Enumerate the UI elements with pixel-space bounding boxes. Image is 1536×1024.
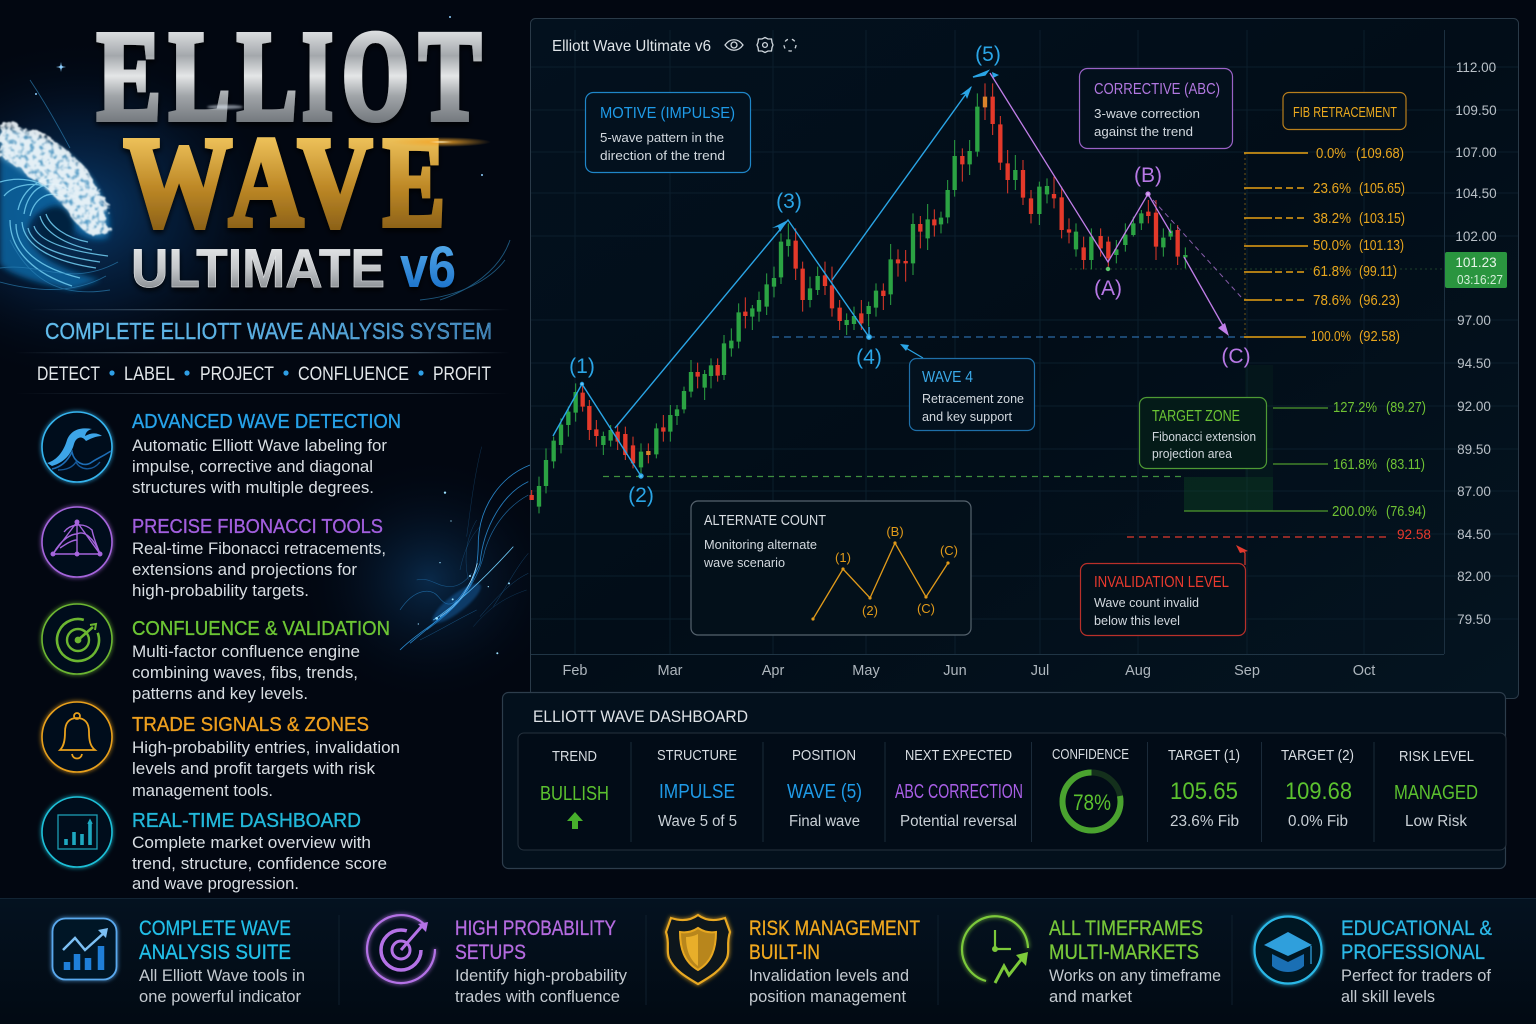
callout: wave 4 xyxy=(900,344,1034,430)
icon: target xyxy=(42,604,112,674)
callout: invalidation level: INVALIDATION LEVEL xyxy=(1094,574,1229,591)
callout: invalidation level: Wave count invalid xyxy=(1094,596,1199,610)
heading: HIGH PROBABILITY xyxy=(455,917,616,940)
tagline: LABEL xyxy=(124,364,175,385)
metric: position: POSITION xyxy=(792,747,856,764)
metric: target 2: TARGET (2) xyxy=(1281,747,1354,764)
tagline xyxy=(37,364,491,385)
fibonacci retracement levels: 50.0% xyxy=(1313,238,1351,254)
icon: fibonacci xyxy=(42,507,112,577)
feature: precise fibonacci tools xyxy=(42,507,386,600)
callout: motive impulse: 5-wave pattern in the xyxy=(600,131,724,145)
fibonacci extension levels: (89.27) xyxy=(1386,400,1426,416)
callout: wave 4: Retracement zone xyxy=(922,392,1024,406)
callout: alternate count: wave scenario xyxy=(703,556,785,570)
fibonacci retracement levels xyxy=(1244,146,1405,345)
fibonacci retracement levels: 0.0% xyxy=(1316,146,1346,162)
fibonacci extension levels: (83.11) xyxy=(1386,457,1425,473)
title: WAVE: A xyxy=(229,111,303,253)
callout: wave 4: WAVE 4 xyxy=(922,369,973,386)
metric: target 1: TARGET (1) xyxy=(1168,747,1240,764)
title: WAVE: E xyxy=(383,111,445,253)
current price tag: 101.23 xyxy=(1455,255,1497,270)
description: management tools. xyxy=(132,782,273,800)
heading: BUILT-IN xyxy=(749,941,820,964)
icon: bell xyxy=(42,702,112,772)
callout: target zone: TARGET ZONE xyxy=(1152,408,1240,425)
description xyxy=(455,967,628,1006)
feature: complete wave analysis suite xyxy=(52,917,305,1006)
fibonacci retracement levels: 100.0% xyxy=(1311,329,1351,345)
decorative stars xyxy=(35,16,483,176)
heading: CONFLUENCE & VALIDATION xyxy=(132,618,390,640)
feature: advanced wave detection xyxy=(42,411,401,497)
icon: clock with arrow xyxy=(962,916,1028,983)
metric: structure: STRUCTURE xyxy=(657,747,737,764)
price axis: 92.00 xyxy=(1457,399,1491,414)
callout: corrective abc xyxy=(1080,68,1232,148)
wave labels: (5) xyxy=(975,43,1001,66)
icon: dashboard chart xyxy=(42,797,112,867)
alternate count mini chart: (C) xyxy=(940,543,958,558)
feature: all timeframes multi-markets xyxy=(962,916,1221,1006)
description: Complete market overview with xyxy=(132,834,371,852)
fibonacci extension levels: 127.2% xyxy=(1333,400,1377,416)
price axis: 87.00 xyxy=(1457,484,1491,499)
metric: next expected: ABC CORRECTION xyxy=(895,781,1023,803)
description: Real-time Fibonacci retracements, xyxy=(132,540,386,558)
time axis: Mar xyxy=(658,663,683,679)
wave labels: (1) xyxy=(569,355,595,378)
description: and wave progression. xyxy=(132,875,299,893)
description: Automatic Elliott Wave labeling for xyxy=(132,437,388,455)
time axis: Jun xyxy=(943,663,967,679)
feature: educational and professional xyxy=(1254,916,1492,1006)
illustration: ocean wave xyxy=(0,80,510,300)
metric: next expected xyxy=(895,747,1023,830)
fibonacci extension levels: 161.8% xyxy=(1333,457,1377,473)
panel: dashboard xyxy=(502,692,1506,868)
wave lines: motive xyxy=(553,71,999,478)
fibonacci retracement levels: 61.8% xyxy=(1313,264,1351,280)
description xyxy=(132,437,388,497)
fibonacci retracement levels: (105.65) xyxy=(1359,181,1405,197)
description: patterns and key levels. xyxy=(132,685,308,703)
metric: target 1: 105.65 xyxy=(1170,778,1238,805)
description: Perfect for traders of xyxy=(1341,967,1491,985)
metric: trend xyxy=(540,748,609,829)
description: Works on any timeframe xyxy=(1049,967,1221,985)
description xyxy=(132,739,400,800)
description: High-probability entries, invalidation xyxy=(132,739,400,757)
time axis: Sep xyxy=(1234,663,1260,679)
title: ELLIOT: L xyxy=(237,5,297,147)
callout: corrective abc: against the trend xyxy=(1094,125,1193,139)
callout: motive impulse xyxy=(586,92,750,172)
wave labels: (B) xyxy=(1134,164,1162,187)
callout: target zone xyxy=(1140,398,1266,468)
heading: MULTI-MARKETS xyxy=(1049,941,1199,964)
metric: target 1 xyxy=(1168,747,1240,830)
metric: risk level: RISK LEVEL xyxy=(1399,748,1474,765)
title: ELLIOT: T xyxy=(419,5,481,147)
metric: target 2: 0.0% Fib xyxy=(1288,813,1348,830)
metric: structure xyxy=(657,747,737,830)
metric: risk level: MANAGED xyxy=(1394,782,1478,804)
icon: wave xyxy=(42,412,112,482)
metric: position: Final wave xyxy=(789,813,860,830)
metric: target 1: 23.6% Fib xyxy=(1170,813,1239,830)
description xyxy=(139,967,305,1006)
callout: alternate count xyxy=(691,501,971,635)
price axis: 109.50 xyxy=(1455,103,1497,118)
time axis: Apr xyxy=(762,663,784,679)
heading xyxy=(1341,917,1492,964)
fibonacci retracement levels: (96.23) xyxy=(1359,293,1400,309)
icon: graduation cap xyxy=(1254,916,1322,984)
metric: next expected: NEXT EXPECTED xyxy=(905,747,1012,764)
price axis: 84.50 xyxy=(1457,527,1491,542)
wave labels xyxy=(569,43,1251,507)
title: ULTIMATE: ULTIMATE xyxy=(131,237,385,299)
icon: target xyxy=(367,915,435,983)
description: levels and profit targets with risk xyxy=(132,760,376,778)
price axis: 89.50 xyxy=(1457,442,1491,457)
heading xyxy=(1049,917,1203,964)
heading: PROFESSIONAL xyxy=(1341,941,1485,964)
price axis: 82.00 xyxy=(1457,569,1491,584)
price axis: 94.50 xyxy=(1457,356,1491,371)
icon: shield xyxy=(666,915,730,984)
title flare xyxy=(207,105,491,147)
description xyxy=(132,643,360,703)
fibonacci retracement levels: 23.6% xyxy=(1313,181,1351,197)
callout: corrective abc: 3-wave correction xyxy=(1094,107,1200,121)
description xyxy=(132,834,387,893)
dashboard title: ELLIOTT WAVE DASHBOARD xyxy=(533,707,748,726)
fibonacci extension levels: (76.94) xyxy=(1386,504,1426,520)
metric: confidence gauge xyxy=(1052,746,1129,830)
tagline: PROFIT xyxy=(433,364,491,385)
feature: trade signals and zones xyxy=(42,702,400,800)
title: v6: v6 xyxy=(400,235,456,300)
metric: structure: IMPULSE xyxy=(659,781,735,803)
callout: target zone: Fibonacci extension xyxy=(1152,430,1256,444)
description: Invalidation levels and xyxy=(749,967,909,985)
price axis: 104.50 xyxy=(1455,186,1497,201)
fibonacci retracement levels: (92.58) xyxy=(1359,329,1400,345)
callout: target zone: projection area xyxy=(1152,447,1232,461)
title: ELLIOT: I xyxy=(302,5,333,147)
alternate count mini chart: (C) xyxy=(917,601,935,616)
alternate count mini chart: (2) xyxy=(862,603,878,618)
wave labels: (3) xyxy=(776,190,802,213)
callout: invalidation level xyxy=(1080,545,1248,636)
time axis: May xyxy=(852,663,880,679)
panel: bottom features band xyxy=(0,898,1536,1024)
icon: rising chart xyxy=(52,918,116,980)
support and resistance lines xyxy=(603,269,1444,476)
invalidation line: 92.58 xyxy=(1397,526,1431,542)
heading: ALL TIMEFRAMES xyxy=(1049,917,1203,940)
price axis: 112.00 xyxy=(1456,60,1496,75)
description: Identify high-probability xyxy=(455,967,628,985)
callout: motive impulse: MOTIVE (IMPULSE) xyxy=(600,105,735,122)
alternate count mini chart: (1) xyxy=(835,550,851,565)
time axis xyxy=(562,663,1375,679)
description xyxy=(132,540,386,600)
description: All Elliott Wave tools in xyxy=(139,967,305,985)
description xyxy=(1049,967,1221,1006)
wave labels: (A) xyxy=(1094,277,1122,300)
description: extensions and projections for xyxy=(132,561,358,579)
description: structures with multiple degrees. xyxy=(132,479,374,497)
description: trend, structure, confidence score xyxy=(132,855,387,873)
chart title: Elliott Wave Ultimate v6 xyxy=(552,38,711,55)
fibonacci retracement levels: 38.2% xyxy=(1313,211,1351,227)
metric: position xyxy=(787,747,862,830)
tagline: DETECT xyxy=(37,364,100,385)
time axis: Aug xyxy=(1125,663,1151,679)
alternate count mini chart: (B) xyxy=(886,524,904,539)
callout: wave 4: and key support xyxy=(922,410,1013,424)
price axis: 107.00 xyxy=(1455,145,1497,160)
price axis: 97.00 xyxy=(1457,313,1491,328)
wave labels: (2) xyxy=(628,484,654,507)
callout: invalidation level: below this level xyxy=(1094,614,1180,628)
time axis: Oct xyxy=(1353,663,1375,679)
heading: SETUPS xyxy=(455,941,526,964)
panel: price chart xyxy=(530,18,1518,698)
target zone shading xyxy=(1184,365,1273,511)
current price tag xyxy=(1445,252,1507,288)
metric: structure: Wave 5 of 5 xyxy=(658,813,737,830)
description: one powerful indicator xyxy=(139,988,302,1006)
callout: alternate count: ALTERNATE COUNT xyxy=(704,513,826,529)
heading: RISK MANAGEMENT xyxy=(749,917,920,940)
fibonacci extension levels: 200.0% xyxy=(1332,504,1377,520)
icon: settings xyxy=(757,38,773,52)
price axis xyxy=(1455,60,1497,627)
metric: trend: TREND xyxy=(552,748,597,765)
current price tag: 03:16:27 xyxy=(1457,273,1503,287)
metric: confidence gauge: CONFIDENCE xyxy=(1052,746,1129,763)
metric: confidence gauge: 78% xyxy=(1073,790,1111,815)
description: impulse, corrective and diagonal xyxy=(132,458,373,476)
metric: trend: BULLISH xyxy=(540,783,609,805)
heading: ANALYSIS SUITE xyxy=(139,941,291,964)
title: ELLIOT: E xyxy=(97,5,161,147)
heading: EDUCATIONAL & xyxy=(1341,917,1492,940)
heading: ADVANCED WAVE DETECTION xyxy=(132,411,401,433)
callout: motive impulse: direction of the trend xyxy=(600,149,725,163)
icon: dashed circle xyxy=(784,39,796,51)
price axis: 79.50 xyxy=(1457,612,1491,627)
title: WAVE: V xyxy=(298,111,372,253)
description: Multi-factor confluence engine xyxy=(132,643,360,661)
feature: confluence and validation xyxy=(42,604,390,703)
candlesticks xyxy=(532,83,1185,513)
alternate count mini chart xyxy=(811,524,958,621)
title: ELLIOT: O xyxy=(342,5,409,147)
description xyxy=(749,967,909,1006)
heading: TRADE SIGNALS & ZONES xyxy=(132,714,369,736)
icon: eye xyxy=(725,40,743,50)
title: WAVE: W xyxy=(124,111,232,253)
tagline: CONFLUENCE xyxy=(298,364,409,385)
fibonacci retracement levels: 78.6% xyxy=(1313,293,1351,309)
metric: next expected: Potential reversal xyxy=(900,813,1017,830)
heading xyxy=(139,917,291,964)
metric: position: WAVE (5) xyxy=(787,781,862,803)
callout: fib retracement: FIB RETRACEMENT xyxy=(1293,105,1397,121)
description: combining waves, fibs, trends, xyxy=(132,664,358,682)
heading: COMPLETE WAVE xyxy=(139,917,291,940)
callout: alternate count: Monitoring alternate xyxy=(704,538,817,552)
description: trades with confluence xyxy=(455,988,620,1006)
fibonacci retracement levels: (109.68) xyxy=(1356,146,1404,162)
price axis: 102.00 xyxy=(1455,229,1497,244)
metric: risk level: Low Risk xyxy=(1405,813,1467,830)
callout: corrective abc: CORRECTIVE (ABC) xyxy=(1094,81,1220,98)
feature: high probability setups xyxy=(367,915,628,1006)
metric: risk level xyxy=(1394,748,1478,830)
feature: real-time dashboard xyxy=(42,797,387,893)
feature: risk management built-in xyxy=(666,915,920,1006)
heading xyxy=(749,917,920,964)
heading xyxy=(455,917,616,964)
subtitle: COMPLETE ELLIOTT WAVE ANALYSIS SYSTEM xyxy=(45,318,492,344)
description: all skill levels xyxy=(1341,988,1435,1006)
fibonacci retracement levels: (103.15) xyxy=(1359,211,1405,227)
wave labels: (4) xyxy=(856,346,882,369)
description xyxy=(1341,967,1491,1006)
title: ELLIOT: L xyxy=(169,5,230,147)
description: high-probability targets. xyxy=(132,582,309,600)
wave lines: corrective xyxy=(990,73,1242,336)
time axis: Jul xyxy=(1031,663,1049,679)
time axis: Feb xyxy=(562,663,588,679)
metric: target 2: 109.68 xyxy=(1285,778,1352,805)
callout: fib retracement xyxy=(1283,92,1406,130)
fibonacci extension levels xyxy=(1184,400,1426,520)
tagline: PROJECT xyxy=(200,364,274,385)
illustration: energy strands xyxy=(400,447,530,654)
fibonacci retracement levels: (99.11) xyxy=(1359,264,1397,280)
description: position management xyxy=(749,988,906,1006)
heading: PRECISE FIBONACCI TOOLS xyxy=(132,516,383,538)
heading: REAL-TIME DASHBOARD xyxy=(132,810,361,832)
metric: target 2 xyxy=(1281,747,1354,830)
description: and market xyxy=(1049,988,1132,1006)
fibonacci retracement levels: (101.13) xyxy=(1359,238,1404,254)
wave labels: (C) xyxy=(1221,345,1251,368)
